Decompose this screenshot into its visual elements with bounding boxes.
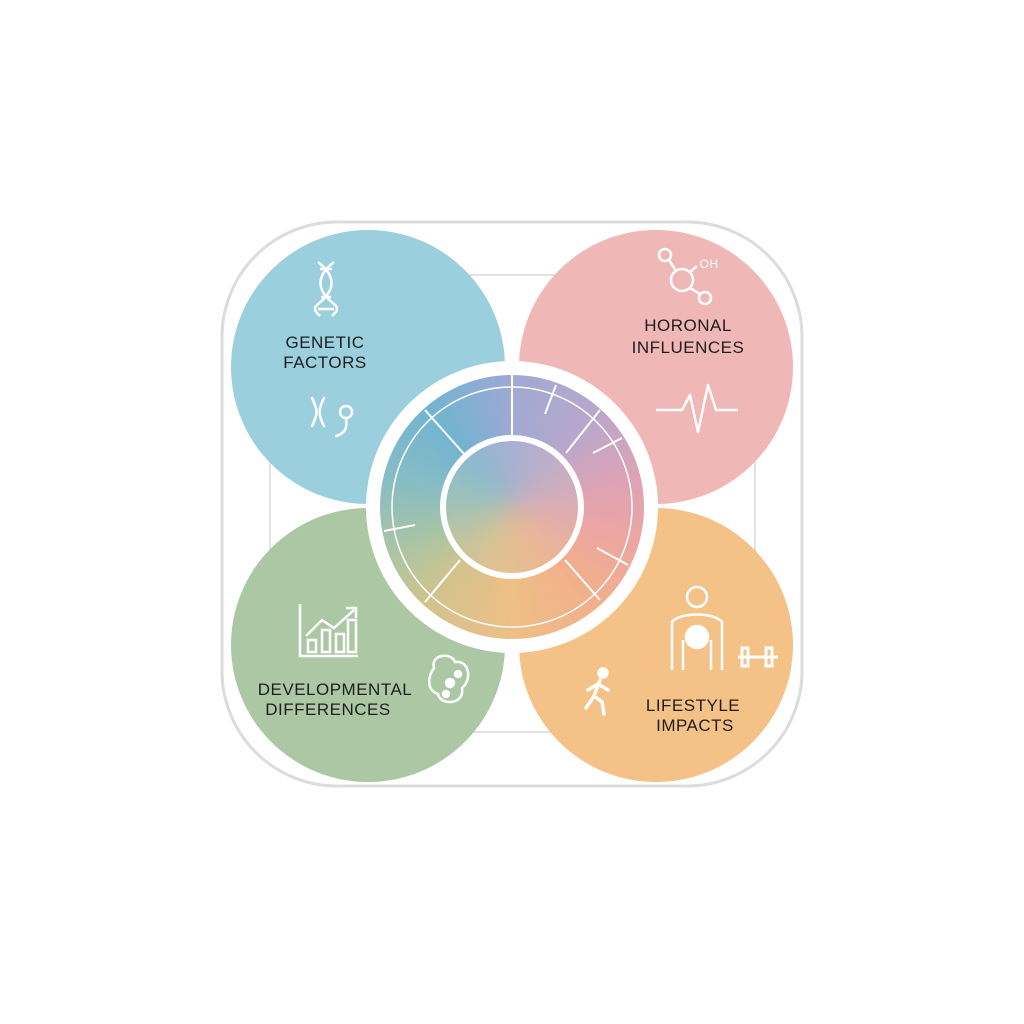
heading: developmental differences: DEVELOPMENTAL	[258, 680, 412, 699]
central wheel gradient	[380, 375, 644, 639]
icon: runner	[586, 669, 608, 714]
heading: hormonal influences: INFLUENCES	[632, 338, 744, 357]
heading: developmental differences: DIFFERENCES	[265, 700, 391, 719]
icon: dumbbell	[738, 648, 778, 666]
heading: lifestyle impacts	[646, 696, 740, 735]
heading: developmental differences	[258, 680, 412, 719]
icon: bar chart	[300, 604, 358, 656]
heading: genetic factors: GENETIC	[285, 333, 365, 352]
central wheel lines	[384, 375, 632, 627]
heading: lifestyle impacts: LIFESTYLE	[646, 696, 740, 715]
panel: developmental differences	[231, 508, 505, 782]
icon: body	[672, 587, 722, 670]
heading: genetic factors: FACTORS	[283, 353, 367, 372]
icon: chromosomes	[312, 398, 352, 436]
heading: genetic factors	[283, 333, 367, 372]
heading: lifestyle impacts: IMPACTS	[656, 716, 734, 735]
wheel base	[366, 361, 658, 653]
icon: dna	[315, 262, 337, 316]
heading: hormonal influences	[632, 316, 744, 357]
panel: genetic factors	[231, 230, 505, 504]
icon: molecule	[659, 249, 718, 304]
panel: lifestyle impacts	[519, 508, 793, 782]
outer frame	[222, 222, 802, 786]
panel: hormonal influences	[519, 230, 793, 504]
icon: cell	[429, 656, 468, 702]
icon: heartbeat	[656, 385, 738, 432]
central disc gradient	[446, 442, 578, 573]
heading: hormonal influences: HORONAL	[644, 316, 732, 335]
icon: molecule: OH	[700, 257, 718, 271]
